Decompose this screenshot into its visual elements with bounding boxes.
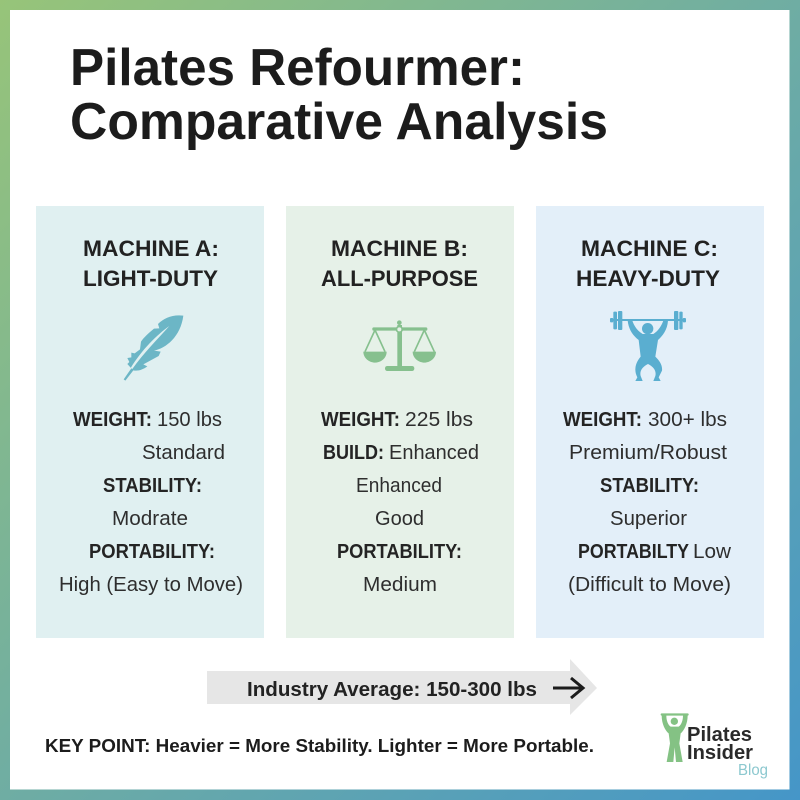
title — [70, 39, 608, 151]
stats: machine A — [59, 408, 243, 596]
stats: machine B — [321, 408, 479, 596]
heading: machine C — [576, 236, 720, 291]
icon: logo figure — [661, 713, 689, 762]
stats: machine C: (Difficult to Move) — [568, 573, 731, 596]
stats: machine B: WEIGHT: — [321, 409, 400, 431]
stats: machine B: BUILD: — [323, 442, 384, 464]
title: Pilates Refourmer: — [70, 39, 525, 97]
stats: machine B: Enhanced — [389, 441, 479, 464]
stats: machine A: Standard — [142, 441, 225, 464]
panel: machine A — [36, 206, 264, 638]
heading: machine C: MACHINE C: — [581, 236, 718, 261]
logo: Pilates Insider Blog: Blog — [738, 762, 768, 779]
stats: machine C: Low — [693, 540, 731, 563]
icon: small arrow — [553, 678, 583, 698]
arrow: industry average — [207, 659, 597, 715]
icon: feather — [124, 315, 183, 381]
stats: machine B: PORTABILITY: — [337, 541, 462, 563]
stats: machine A: 150 lbs — [157, 408, 222, 431]
title: Comparative Analysis — [70, 93, 608, 151]
heading: machine B: ALL-PURPOSE — [321, 266, 478, 291]
stats: machine B: Enhanced — [356, 474, 442, 497]
icon: balance scale — [363, 320, 436, 371]
stats: machine C: Superior — [610, 507, 687, 530]
stats: machine C — [563, 408, 731, 596]
logo: Pilates Insider Blog — [661, 713, 768, 779]
heading: machine A: LIGHT-DUTY — [83, 266, 218, 291]
stats: machine A: STABILITY: — [103, 475, 202, 497]
heading: machine B: MACHINE B: — [331, 236, 468, 261]
stats: machine C: PORTABILTY — [578, 541, 690, 563]
stats: machine A: High (Easy to Move) — [59, 573, 243, 596]
panel: machine C — [536, 206, 764, 638]
stats: machine A: WEIGHT: — [73, 409, 152, 431]
stats: machine C: Premium/Robust — [569, 441, 727, 464]
stats: machine C: 300+ lbs — [648, 408, 727, 431]
stats: machine C: WEIGHT: — [563, 409, 642, 431]
icon: weightlifter — [610, 311, 686, 381]
stats: machine A: Modrate — [112, 507, 188, 530]
label: industry average: Industry Average: 150-300 lbs — [247, 678, 537, 701]
stats: machine C: STABILITY: — [600, 475, 699, 497]
heading: machine A — [83, 236, 219, 291]
heading: machine A: MACHINE A: — [83, 236, 219, 261]
stats: machine B: Medium — [363, 573, 437, 596]
heading: machine C: HEAVY-DUTY — [576, 266, 720, 291]
key point: KEY POINT: Heavier = More Stability. Lighter = More Portable. — [45, 735, 594, 756]
logo: Pilates Insider Blog: Insider — [687, 742, 753, 764]
stats: machine A: PORTABILITY: — [89, 541, 215, 563]
logo: Pilates Insider Blog: Pilates — [687, 724, 752, 746]
panel: machine B — [286, 206, 514, 638]
stats: machine B: 225 lbs — [405, 408, 473, 431]
heading: machine B — [321, 236, 478, 291]
stats: machine B: Good — [375, 507, 424, 530]
